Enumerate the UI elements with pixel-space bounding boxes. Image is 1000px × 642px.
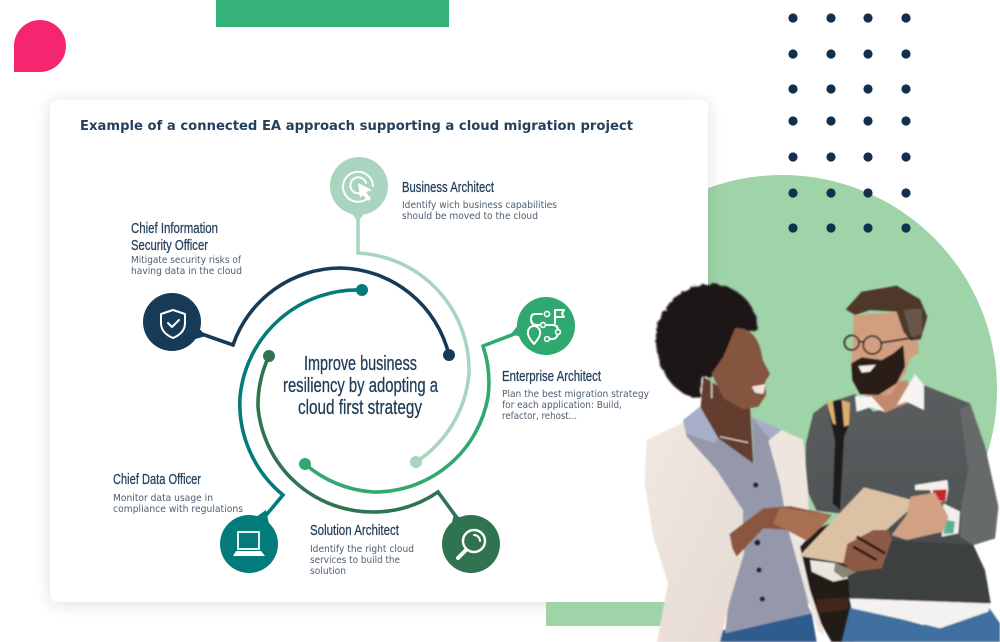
man: watch — [834, 563, 857, 578]
big light green circle — [567, 175, 997, 605]
text: enterprise architect: Plan the best migration strategy — [502, 389, 649, 400]
woman: jeans — [712, 613, 817, 642]
woman: cuff — [709, 523, 735, 565]
icon: target with cursor — [330, 157, 388, 222]
man: jeans — [842, 605, 1000, 642]
woman: hair — [656, 284, 757, 398]
man: face — [851, 312, 918, 395]
man: collar — [855, 374, 924, 412]
center statement: resiliency by adopting a — [283, 374, 438, 397]
icon: laptop — [220, 510, 278, 573]
arc: chief data officer — [240, 284, 368, 520]
man: neck — [863, 380, 915, 413]
man: left hand — [843, 530, 892, 572]
man: cuff and watch — [942, 503, 960, 537]
text: solution architect: solution — [310, 566, 346, 577]
text: business architect: Business Architect — [402, 179, 495, 196]
text: enterprise architect: Enterprise Architect — [502, 368, 602, 385]
top green bar — [216, 0, 449, 27]
man: smile — [858, 365, 876, 373]
man: beard — [851, 345, 905, 395]
text: enterprise architect: refactor, rehost... — [502, 411, 577, 422]
text: chief data officer: Chief Data Officer — [113, 471, 201, 488]
text: chief information security officer: Mitigate security risks of — [131, 255, 241, 266]
man: white cuff behind tablet — [810, 560, 848, 582]
woman: earring — [709, 382, 714, 398]
woman: neck and chest — [700, 377, 753, 464]
icon: migration route with flag — [511, 297, 575, 355]
arc: chief information security officer — [196, 268, 455, 361]
pink speech-drop shape — [14, 20, 66, 72]
text: chief data officer: compliance with regulations — [113, 504, 243, 515]
center statement — [283, 352, 438, 419]
woman: blazer left — [645, 423, 744, 642]
text: enterprise architect: for each application: Build, — [502, 400, 622, 411]
man: backpack strap — [827, 400, 850, 510]
man: shirt hem — [849, 598, 991, 628]
man: glasses — [844, 335, 913, 354]
woman: necklace — [720, 437, 748, 443]
text: solution architect: services to build the — [310, 555, 400, 566]
text: enterprise architect — [502, 368, 649, 422]
arc: enterprise architect — [299, 331, 522, 492]
text: chief data officer — [113, 471, 243, 515]
man: coffee cup — [915, 480, 948, 502]
woman: blazer right — [768, 430, 825, 635]
center statement: cloud first strategy — [298, 396, 423, 419]
icon: magnifying glass — [442, 514, 500, 573]
text: solution architect: Identify the right cloud — [310, 544, 414, 555]
dark gap under tablet — [788, 517, 857, 642]
panel: diagram card — [50, 100, 708, 602]
text: business architect: should be moved to the cloud — [402, 211, 538, 222]
photo: two colleagues with a tablet — [645, 284, 1000, 642]
bottom green bar — [546, 602, 676, 626]
text: chief information security officer: Chief Information — [131, 220, 218, 237]
woman: shirt — [683, 407, 812, 633]
man: sweater — [805, 385, 998, 603]
text: chief data officer: Monitor data usage in — [113, 493, 213, 504]
text: solution architect — [310, 522, 414, 577]
text: chief information security officer — [131, 220, 242, 277]
tablet — [799, 487, 918, 564]
man: right hand — [892, 493, 948, 540]
text: business architect: Identify wich business capabilities — [402, 200, 557, 211]
text: chief information security officer: Security Officer — [131, 237, 208, 254]
woman: forearm and hand — [726, 506, 832, 557]
center statement: Improve business — [304, 352, 417, 375]
arc: solution architect — [258, 350, 460, 522]
woman: buttons — [753, 482, 765, 602]
icon: shield with check — [143, 293, 206, 351]
text: chief information security officer: having data in the cloud — [131, 266, 242, 277]
man: hair — [846, 286, 927, 341]
dot grid — [788, 13, 911, 233]
text: solution architect: Solution Architect — [310, 522, 400, 539]
title: Example of a connected EA approach supporting a cloud migration project — [80, 118, 634, 134]
woman: face — [712, 328, 770, 409]
arc: business architect — [358, 212, 469, 468]
text: business architect — [402, 179, 557, 222]
